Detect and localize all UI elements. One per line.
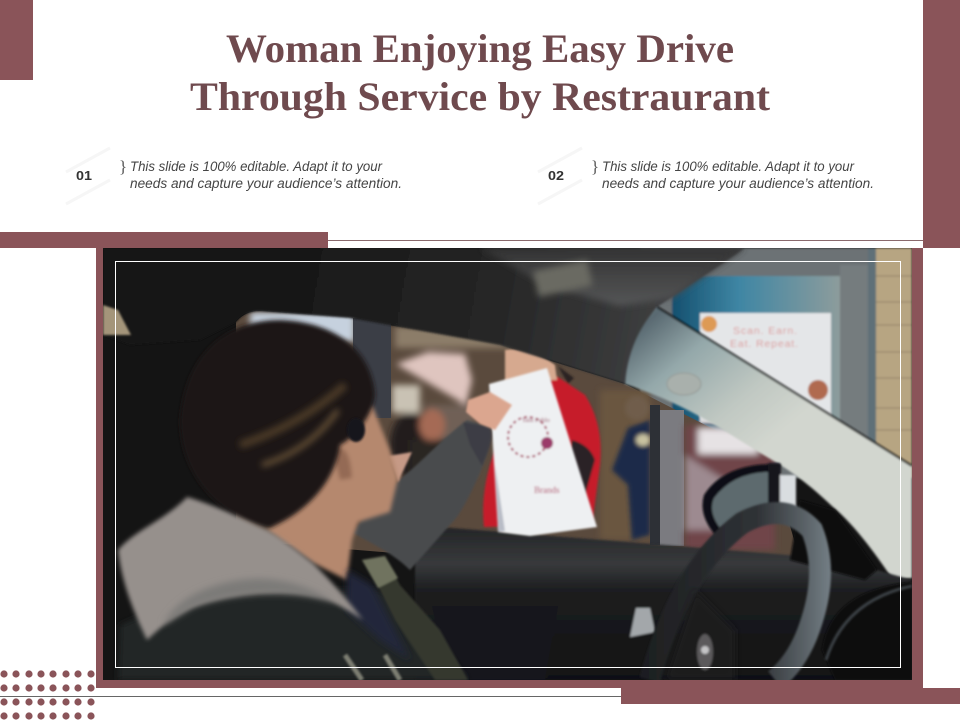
jacket sleeve arm <box>353 420 491 570</box>
door panel <box>415 525 912 680</box>
poster: Eat. Repeat. <box>730 338 798 350</box>
description 02: This slide is 100% editable. Adapt it to your <box>602 159 854 174</box>
hand <box>466 392 512 430</box>
jacket body <box>118 590 468 680</box>
poster <box>700 313 831 423</box>
side window view <box>236 311 800 560</box>
window post <box>650 405 684 546</box>
top-left accent block <box>0 0 33 80</box>
neck and face <box>267 405 398 580</box>
side mirror <box>702 463 796 536</box>
storefront through windshield <box>640 248 912 478</box>
dashboard <box>790 500 912 680</box>
number 02: 02 <box>548 168 564 183</box>
bracket 01: } <box>119 157 127 176</box>
top-right accent bar <box>923 0 960 248</box>
window pillar <box>353 318 391 418</box>
bag logo <box>508 417 560 495</box>
description 01: needs and capture your audience’s attention. <box>130 176 402 191</box>
text block 01 <box>66 148 402 204</box>
description 02 <box>602 159 874 191</box>
description 01 <box>130 159 402 191</box>
text block 02 <box>538 148 874 204</box>
inset white outline <box>116 262 900 668</box>
steering wheel <box>650 513 820 680</box>
worker in red <box>483 349 601 527</box>
grey hood <box>118 497 363 640</box>
paper bag <box>489 368 597 536</box>
dark blouse <box>347 570 410 660</box>
bag logo: Tain Pablo <box>522 417 550 424</box>
bag logo: Brands <box>534 485 560 495</box>
poster: Scan. Earn. <box>733 325 797 337</box>
title: Through Service by Restraurant <box>190 74 771 119</box>
description 01: This slide is 100% editable. Adapt it to your <box>130 159 382 174</box>
title: Woman Enjoying Easy Drive <box>226 26 734 71</box>
store window <box>672 276 840 436</box>
pink vehicle reflection <box>685 425 775 550</box>
tan corner behind seat <box>103 305 131 335</box>
number 01: 01 <box>76 168 92 183</box>
description 02: needs and capture your audience’s attention. <box>602 176 874 191</box>
photo frame <box>0 232 960 704</box>
bracket 02: } <box>591 157 599 176</box>
door handle <box>630 608 655 637</box>
dot pattern <box>0 670 95 720</box>
seat belt <box>362 556 468 680</box>
hair <box>180 320 375 528</box>
photo: woman at drive through window <box>103 248 912 680</box>
blue uniform worker <box>612 396 650 540</box>
title <box>190 26 771 119</box>
A-pillar <box>625 307 912 580</box>
woman <box>118 320 512 680</box>
brick wall <box>876 248 912 478</box>
headliner and visor <box>236 248 745 384</box>
